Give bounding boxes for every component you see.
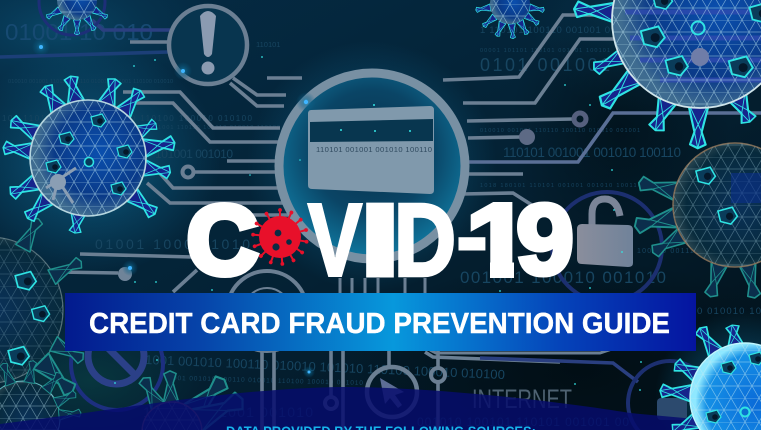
- virus: large left: [2, 74, 176, 234]
- binary code background text: 100 110101 001001 101010 110100 100010 010100: [2, 114, 253, 123]
- title: COVID-19: C: [187, 186, 258, 294]
- title: COVID-19: [187, 202, 573, 278]
- icon: credit card: [308, 106, 434, 194]
- binary code background text: 110101: [256, 40, 280, 49]
- icon: alert exclamation: [169, 6, 247, 84]
- virus: small top left: [45, 0, 109, 35]
- binary code background text: 00001 101101 110101 001001 100101: [480, 48, 610, 54]
- virus: faded right: [633, 143, 761, 300]
- title: COVID-19: D: [394, 182, 456, 298]
- virus: lower centre: [136, 371, 248, 430]
- title: COVID-19: 9: [516, 184, 574, 296]
- virus: faded left large: [0, 215, 87, 400]
- binary code background text: 110101 001001 001010 100110: [503, 145, 681, 160]
- virus: bright lower right: [659, 323, 761, 430]
- binary code background text: 010010 001001 110110 100110 010010 001001 110100 010010: [8, 79, 173, 85]
- binary code background text: 0 010010 10: [697, 306, 761, 317]
- binary code background text: 1 110101 100110 001001 0: [480, 25, 610, 36]
- icon: cursor in circle: [367, 367, 417, 417]
- binary code background text: 001 001010 100110 010010 110100 100010 001010: [173, 375, 363, 387]
- icon: red coronavirus in title: [251, 208, 309, 266]
- title: COVID-19: 1: [466, 182, 532, 298]
- binary code background text: 1001 001010 100110 010010 101010 110100 100010 010100: [145, 352, 505, 382]
- icon: no entry sign: [71, 318, 163, 410]
- binary code background text: 01001 10001 1010: [95, 236, 250, 252]
- binary code background text: 1018 180101 110101 001001 001010 100110 010010: [480, 183, 670, 189]
- bottom navy curved band: [0, 387, 761, 430]
- binary code background text: 010010 001001 110110 100110 010010 001001: [480, 128, 640, 134]
- virus: large top right: [573, 0, 761, 148]
- circle lower right: [628, 361, 712, 430]
- magnifier ring top left: [39, 0, 105, 35]
- binary code background text: 101001 001010: [155, 147, 233, 161]
- binary code background text: 001001 110110 100110 010010 110100: [150, 125, 280, 131]
- binary code background text: 10101: [0, 306, 62, 328]
- label: INTERNET: INTERNET: [472, 384, 572, 414]
- binary code background text: 001010 100101 110101 001001 00: [417, 415, 629, 429]
- binary code background text: 110101 001001 001010: [143, 404, 313, 420]
- icon: open padlock: [552, 192, 662, 302]
- binary code background text: 0101 001001: [480, 55, 610, 75]
- glowing particles: [32, 38, 642, 391]
- circuit pins: [118, 113, 586, 409]
- title: COVID-19: -: [455, 178, 489, 292]
- icon: credit card: 110101 001001 001010 100110: [316, 145, 432, 154]
- virus: small top centre right: [475, 0, 545, 39]
- binary code background text: 100110 001110 001011 01010: [637, 248, 761, 255]
- central circle with credit card: [279, 73, 465, 259]
- title: COVID-19: I: [359, 182, 401, 298]
- binary code background text: 01001 10 010: [5, 19, 153, 45]
- title: COVID-19: V: [308, 182, 362, 298]
- binary code background text: 001001 100010 001010: [460, 268, 666, 287]
- banner: credit card fraud prevention guide: CREDIT CARD FRAUD PREVENTION GUIDE: [89, 308, 670, 340]
- banner: credit card fraud prevention guide: [65, 293, 696, 351]
- virus: small bright lower left: [0, 360, 81, 430]
